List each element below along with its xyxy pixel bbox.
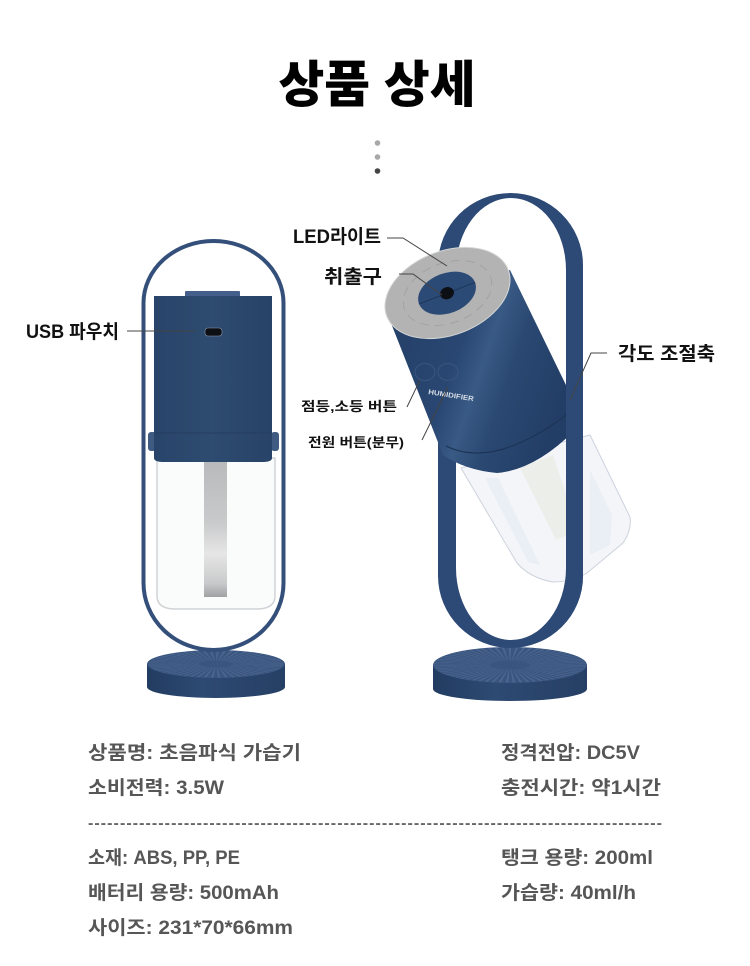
spec: product name: 상품명: 초음파식 가습기 (88, 742, 301, 764)
spec: material: 소재: ABS, PP, PE (88, 847, 240, 869)
label: LED라이트 (293, 226, 447, 266)
spec: power consumption: 소비전력: 3.5W (88, 777, 224, 799)
spec: battery: 배터리 용량: 500mAh (88, 882, 279, 904)
body (387, 270, 583, 473)
front ring leg (540, 386, 583, 642)
label: 각도 조절축: 각도 조절축 (618, 343, 715, 365)
mist tube (520, 455, 578, 540)
glass tank (157, 458, 275, 609)
label: 취출구 (324, 266, 442, 295)
label: 각도 조절축 (570, 343, 715, 400)
hinges (148, 432, 279, 451)
label: 전원 버튼(분무) (308, 387, 448, 450)
pagination dots (375, 140, 380, 174)
ring stand (144, 241, 284, 650)
spec: tank capacity: 탱크 용량: 200ml (501, 847, 653, 869)
top cap (185, 291, 240, 297)
ring stand (438, 193, 583, 648)
USB port (205, 328, 222, 336)
label: 점등,소등 버튼 (301, 380, 420, 414)
label: 전원 버튼(분무): 전원 버튼(분무) (308, 435, 404, 450)
title: 상품 상세 (278, 57, 476, 113)
top plate (372, 230, 523, 356)
glass highlights (485, 470, 612, 565)
body label: HUMIDIFIER (428, 389, 474, 403)
dashed divider: ------------------------------------------------------------------------------------------ (88, 815, 662, 832)
control buttons (415, 364, 458, 380)
label: USB 파우치: USB 파우치 (26, 321, 119, 343)
label: 점등,소등 버튼: 점등,소등 버튼 (301, 399, 397, 414)
glass tank (461, 435, 630, 582)
product: upright humidifier (144, 241, 285, 698)
spec: mist output: 가습량: 40ml/h (501, 882, 636, 904)
mist tube (204, 462, 227, 597)
product: tilted humidifier (372, 193, 630, 701)
label: LED라이트: LED라이트 (293, 226, 381, 248)
body (154, 296, 272, 462)
base (147, 650, 285, 698)
spec: charge time: 충전시간: 약1시간 (501, 777, 661, 799)
spec: size: 사이즈: 231*70*66mm (88, 917, 293, 939)
spec: rated voltage: 정격전압: DC5V (501, 742, 640, 764)
label: 취출구: 취출구 (324, 266, 382, 288)
base (433, 647, 587, 701)
